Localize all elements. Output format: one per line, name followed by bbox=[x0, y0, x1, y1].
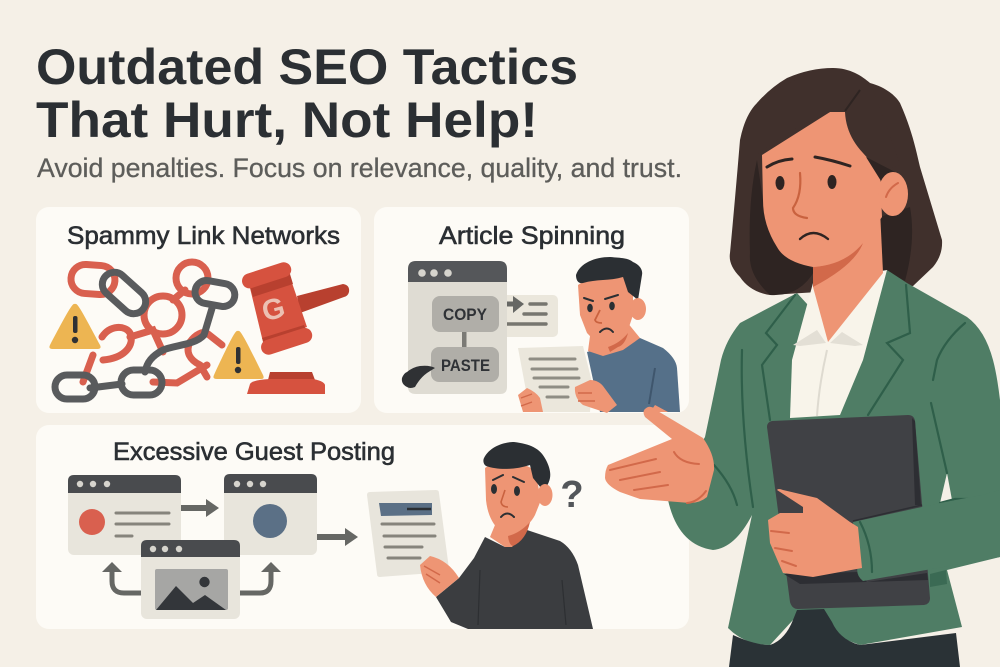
shirt bbox=[790, 270, 887, 418]
icon: gavel with G bbox=[240, 260, 349, 394]
dark inner hair bbox=[750, 160, 912, 295]
dark trousers bbox=[729, 609, 960, 667]
right sleeve bbox=[853, 490, 1000, 581]
tablet bbox=[767, 415, 930, 609]
character: confused man with document bbox=[420, 442, 593, 629]
heading: excessive guest posting: Excessive Guest Posting bbox=[113, 438, 395, 466]
heading: spammy link networks: Spammy Link Networks bbox=[67, 222, 340, 250]
arrow: image to right window bbox=[240, 562, 281, 593]
jacket fold lines bbox=[714, 285, 982, 507]
ear bbox=[878, 172, 908, 216]
character: man reading article bbox=[518, 257, 680, 413]
hair front bbox=[757, 68, 900, 172]
neck bbox=[813, 210, 883, 342]
face bbox=[762, 112, 882, 267]
hand pointing bbox=[605, 407, 714, 503]
panel: spammy link networks bbox=[36, 207, 361, 413]
arrow: window to window bbox=[181, 499, 219, 517]
subtitle: Avoid penalties. Focus on relevance, quality, and trust. bbox=[37, 153, 682, 183]
browser window: red circle article bbox=[68, 475, 181, 555]
jacket bbox=[668, 270, 1000, 645]
browser window: blue circle bbox=[224, 474, 317, 555]
icon: broken chain network bbox=[55, 262, 237, 399]
heading: article spinning: Article Spinning bbox=[439, 222, 625, 250]
title: That Hurt, Not Help! bbox=[36, 92, 538, 148]
arrow: window to document bbox=[317, 528, 358, 546]
facial features bbox=[767, 157, 850, 239]
document bbox=[367, 490, 449, 577]
title: Outdated SEO Tactics bbox=[36, 39, 578, 95]
icon: gavel with G: G bbox=[258, 292, 289, 328]
icon: question mark: ? bbox=[560, 474, 584, 516]
character: worried woman with tablet bbox=[605, 68, 1000, 667]
browser window: image bbox=[141, 540, 240, 619]
title bbox=[36, 39, 578, 148]
hand holding tablet bbox=[768, 489, 862, 577]
browser window: copy paste bbox=[402, 261, 507, 394]
label: paste: PASTE bbox=[441, 356, 490, 375]
icon: warning triangle left bbox=[49, 304, 101, 349]
panel: excessive guest posting bbox=[36, 425, 689, 629]
background gap beside torso bbox=[940, 473, 952, 503]
label: copy: COPY bbox=[443, 305, 488, 324]
panel: article spinning bbox=[374, 207, 689, 413]
icon: warning triangle right bbox=[213, 331, 264, 379]
hair back bbox=[730, 68, 942, 295]
arrow: image to left window bbox=[102, 562, 141, 593]
side panel with arrow and lines bbox=[499, 295, 558, 337]
